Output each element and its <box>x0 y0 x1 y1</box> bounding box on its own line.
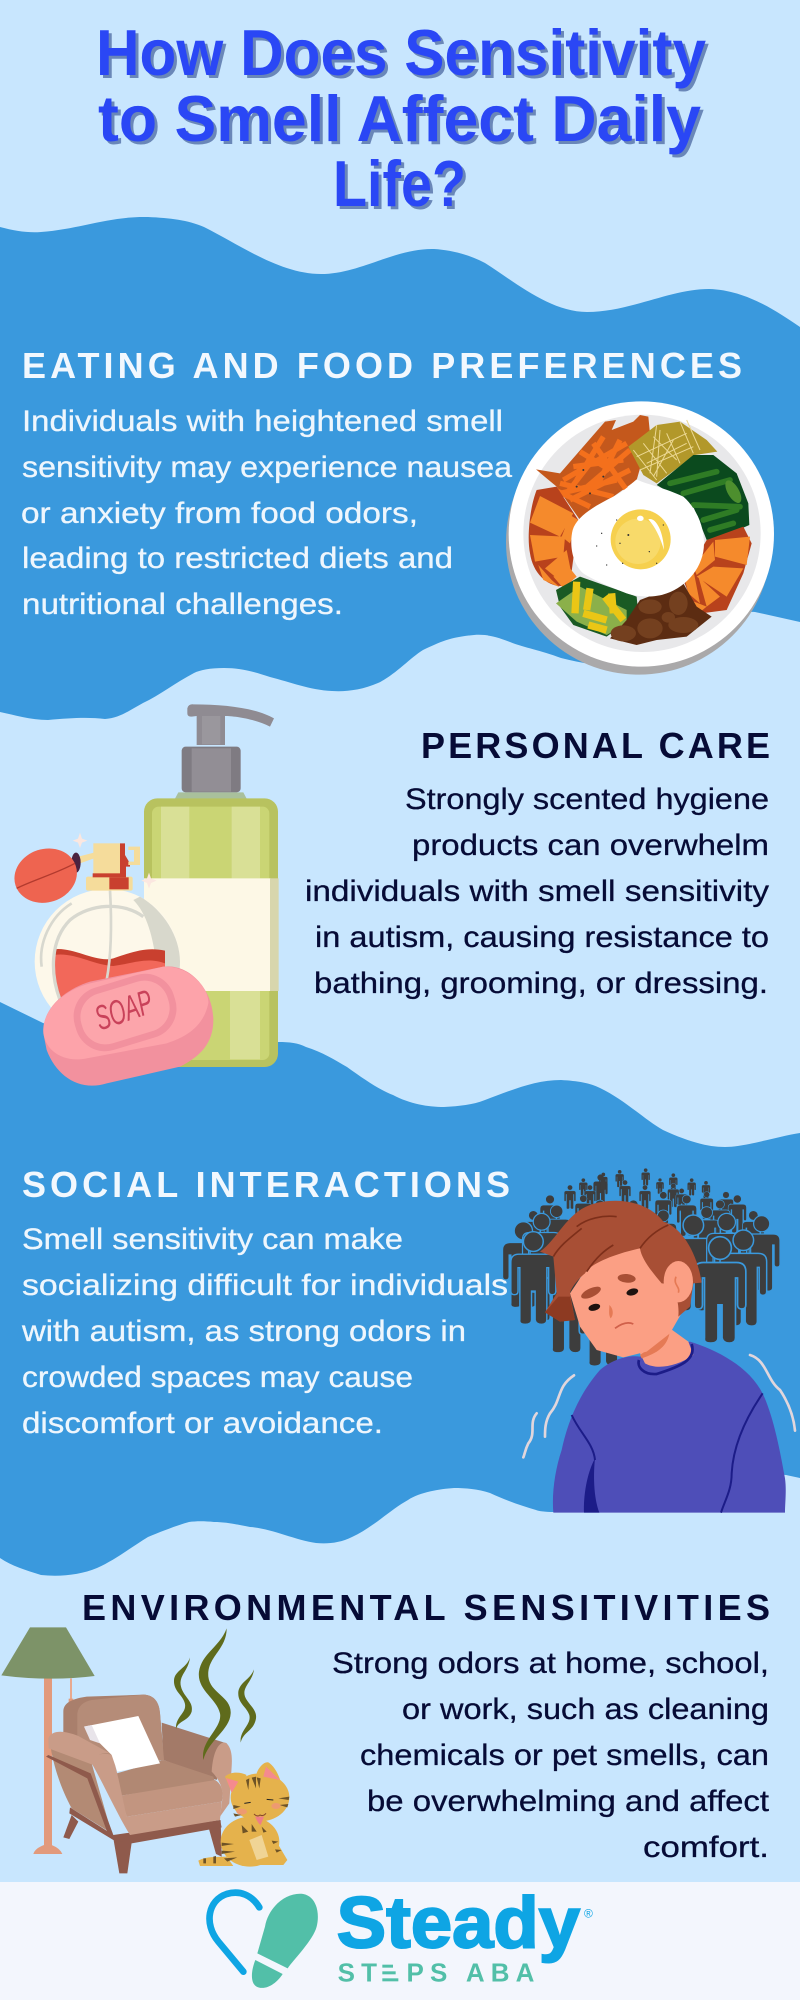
wave band 2 <box>0 1002 800 1576</box>
smell wisps <box>174 1628 256 1760</box>
soap: SOAP <box>90 983 158 1038</box>
text block: personal care: in autism, causing resistance to <box>315 921 769 954</box>
icon: footprint <box>252 1894 318 1988</box>
title <box>96 16 709 223</box>
panel: environmental sensitivities <box>1 1587 770 1873</box>
panel: social interactions <box>21 1164 795 1513</box>
pump bottle <box>144 704 279 1067</box>
armchair <box>46 1695 232 1873</box>
text block: eating: nutritional challenges. <box>22 588 343 621</box>
text block: social interactions: socializing difficult for individuals <box>22 1269 508 1302</box>
heading: personal care: PERSONAL CARE <box>421 725 770 766</box>
wordmark: ® <box>584 1907 593 1921</box>
title: Life? <box>333 147 466 220</box>
text block: personal care <box>305 783 769 1000</box>
text block: social interactions: crowded spaces may cause <box>22 1361 413 1394</box>
text block: social interactions: discomfort or avoidance. <box>22 1407 383 1440</box>
text block: eating: or anxiety from food odors, <box>21 497 418 530</box>
text block: social interactions: with autism, as strong odors in <box>21 1315 466 1348</box>
text block: personal care: bathing, grooming, or dressing. <box>314 967 768 1000</box>
text block: social interactions <box>21 1223 508 1440</box>
icon: heart outline <box>210 1893 259 1972</box>
text block: eating: Individuals with heightened smell <box>22 405 503 438</box>
text block: environmental sensitivities: chemicals or pet smells, can <box>360 1739 769 1772</box>
icon: lamp, armchair, smell and cat <box>1 1627 289 1873</box>
cat <box>198 1762 289 1867</box>
wordmark: Steady <box>337 1883 580 1963</box>
perfume bottle <box>7 833 180 1034</box>
heading: eating: EATING AND FOOD PREFERENCES <box>22 345 742 386</box>
logo: Steady Steps ABA <box>210 1883 593 1988</box>
title: to Smell Affect Daily <box>98 82 701 155</box>
sweater <box>553 1342 786 1513</box>
heading: environmental sensitivities: ENVIRONMENTAL SENSITIVITIES <box>82 1587 770 1628</box>
text block: social interactions: Smell sensitivity can make <box>22 1223 403 1256</box>
hair <box>540 1201 702 1322</box>
lamp <box>1 1627 95 1854</box>
title: Life? <box>336 150 469 223</box>
crowd <box>502 1168 780 1366</box>
text block: environmental sensitivities <box>332 1647 770 1864</box>
title: How Does Sensitivity <box>96 16 706 89</box>
face <box>570 1247 683 1357</box>
wave band 1 <box>0 217 800 720</box>
icon: pump bottle, perfume and soap <box>7 704 279 1086</box>
icon: bibimbap plate <box>506 401 774 675</box>
title: to Smell Affect Daily <box>101 85 704 158</box>
heading: social interactions: SOCIAL INTERACTIONS <box>22 1164 510 1205</box>
wordmark: STEPS ABA <box>338 1958 535 1988</box>
text block: environmental sensitivities: or work, such as cleaning <box>402 1693 769 1726</box>
text block: environmental sensitivities: comfort. <box>643 1831 769 1864</box>
text block: personal care: Strongly scented hygiene <box>405 783 769 816</box>
text block: environmental sensitivities: Strong odors at home, school, <box>332 1647 769 1680</box>
text block: personal care: products can overwhelm <box>412 829 769 862</box>
ear <box>664 1261 693 1302</box>
soap <box>43 966 213 1086</box>
text block: environmental sensitivities: be overwhelming and affect <box>367 1785 770 1818</box>
panel: eating and food preferences <box>21 345 774 675</box>
panel: personal care <box>7 704 770 1086</box>
text block: eating <box>21 405 512 621</box>
text block: eating: leading to restricted diets and <box>22 542 453 575</box>
neck <box>640 1328 693 1367</box>
text block: eating: sensitivity may experience nausea <box>22 451 512 484</box>
icon: anxious boy in front of crowd <box>502 1168 795 1513</box>
text block: personal care: individuals with smell sensitivity <box>305 875 769 908</box>
shiver lines <box>523 1355 795 1457</box>
title: How Does Sensitivity <box>99 19 709 92</box>
footer band <box>0 1882 800 2000</box>
